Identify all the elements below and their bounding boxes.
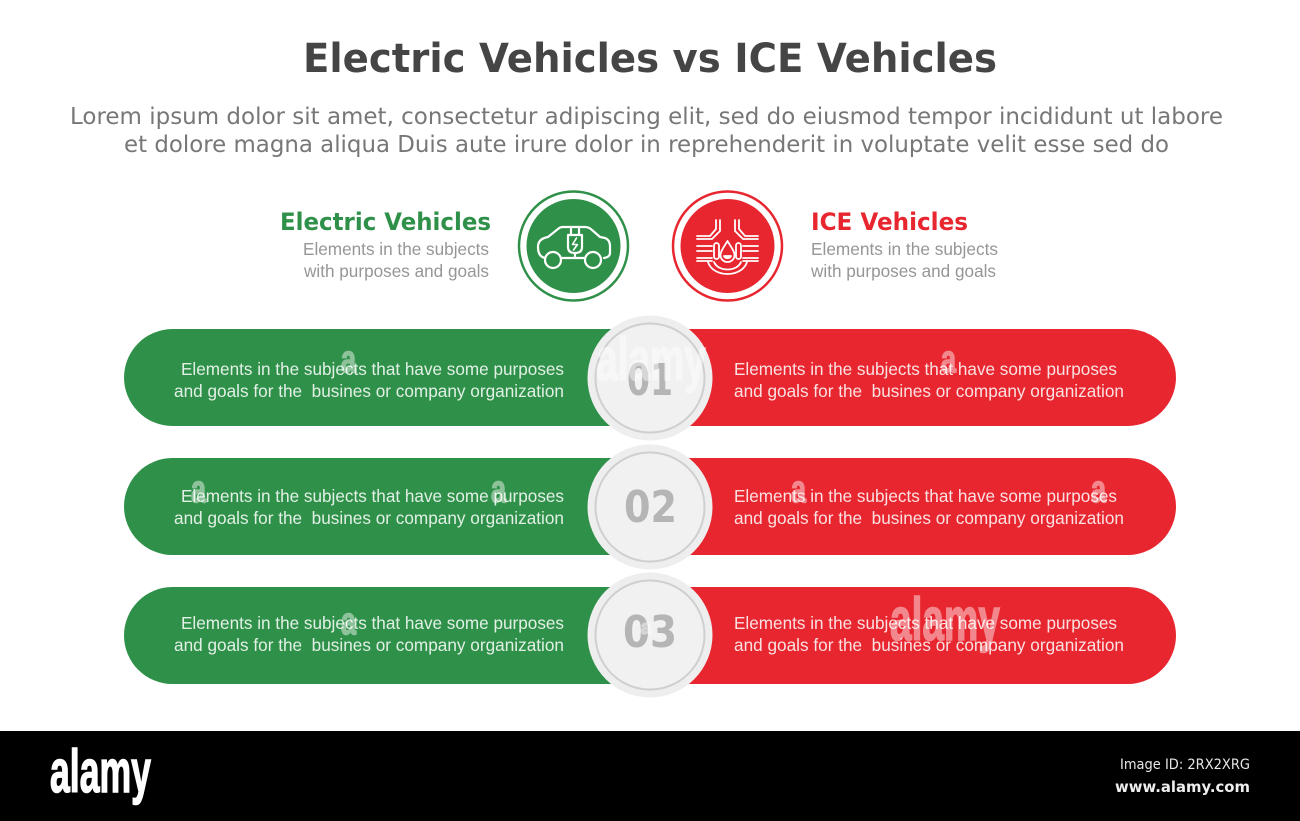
left bar 3 bbox=[124, 587, 650, 684]
image id: Image ID: 2RX2XRG bbox=[1120, 757, 1250, 773]
right text 2: and goals for the busines or company organization bbox=[734, 508, 1124, 528]
intro text block: Lorem ipsum dolor sit amet, consectetur adipiscing elit, sed do eiusmod tempor incididunt ut labore bbox=[70, 104, 1223, 130]
left bar 2 bbox=[124, 458, 650, 555]
left text 3: and goals for the busines or company organization bbox=[174, 635, 564, 655]
watermarks: a bbox=[1091, 469, 1107, 511]
right bar 2 bbox=[650, 458, 1176, 555]
right text 3 bbox=[734, 613, 1124, 655]
watermarks: alamy bbox=[890, 586, 1000, 653]
right bar 1 bbox=[650, 329, 1176, 426]
heading: Electric Vehicles: with purposes and goals bbox=[303, 261, 489, 281]
heading: Electric Vehicles bbox=[280, 208, 491, 281]
left text 1: and goals for the busines or company organization bbox=[174, 381, 564, 401]
right text 1: Elements in the subjects that have some purposes bbox=[734, 359, 1117, 379]
left bar 1 bbox=[124, 329, 650, 426]
intro text block bbox=[70, 104, 1223, 158]
right text 2 bbox=[734, 486, 1124, 528]
number badge 01 bbox=[588, 316, 712, 440]
website: www.alamy.com bbox=[1115, 778, 1250, 796]
footer logo: alamy bbox=[50, 738, 151, 805]
right text 3: and goals for the busines or company organization bbox=[734, 635, 1124, 655]
right text 2: Elements in the subjects that have some purposes bbox=[734, 486, 1117, 506]
left text 2: and goals for the busines or company organization bbox=[174, 508, 564, 528]
watermarks: a bbox=[941, 339, 957, 381]
right text 3: Elements in the subjects that have some purposes bbox=[734, 613, 1117, 633]
number badge 02: 02 bbox=[624, 482, 677, 533]
watermarks: a bbox=[341, 339, 357, 381]
footer bar bbox=[0, 731, 1300, 821]
number badge 01: 01 bbox=[627, 355, 673, 406]
row 1 comparison bar bbox=[124, 329, 1176, 426]
heading: Electric Vehicles: Electric Vehicles bbox=[280, 208, 491, 236]
right text 1: and goals for the busines or company organization bbox=[734, 381, 1124, 401]
heading: ICE Vehicles: ICE Vehicles bbox=[811, 208, 968, 236]
watermarks: a bbox=[791, 469, 807, 511]
heading: ICE Vehicles: Elements in the subjects bbox=[811, 239, 998, 259]
watermarks: a bbox=[191, 469, 207, 511]
number badge 03: 03 bbox=[623, 607, 677, 658]
title: Electric Vehicles vs ICE Vehicles bbox=[303, 36, 997, 82]
watermarks: a bbox=[341, 601, 357, 643]
row 2 comparison bar bbox=[124, 458, 1176, 555]
heading: ICE Vehicles: with purposes and goals bbox=[810, 261, 996, 281]
intro text block: et dolore magna aliqua Duis aute irure dolor in reprehenderit in voluptate velit esse sed do bbox=[124, 132, 1169, 158]
number badge 02 bbox=[588, 444, 712, 570]
heading: ICE Vehicles bbox=[810, 208, 998, 281]
left text 3 bbox=[174, 613, 564, 655]
number badge 03 bbox=[588, 572, 712, 698]
watermarks: a bbox=[641, 617, 652, 639]
left text 2 bbox=[174, 486, 564, 528]
right bar 3 bbox=[650, 587, 1176, 684]
watermarks: alamy bbox=[596, 326, 706, 393]
watermarks bbox=[191, 326, 1107, 653]
row 3 comparison bar bbox=[124, 587, 1176, 684]
icon: electric car badge bbox=[519, 192, 628, 300]
heading: Electric Vehicles: Elements in the subjects bbox=[303, 239, 489, 259]
watermarks: a bbox=[491, 469, 507, 511]
icon: engine oil badge bbox=[673, 192, 782, 300]
right text 1 bbox=[734, 359, 1124, 401]
left text 1: Elements in the subjects that have some purposes bbox=[181, 359, 564, 379]
left text 3: Elements in the subjects that have some purposes bbox=[181, 613, 564, 633]
left text 2: Elements in the subjects that have some purposes bbox=[181, 486, 564, 506]
left text 1 bbox=[174, 359, 564, 401]
